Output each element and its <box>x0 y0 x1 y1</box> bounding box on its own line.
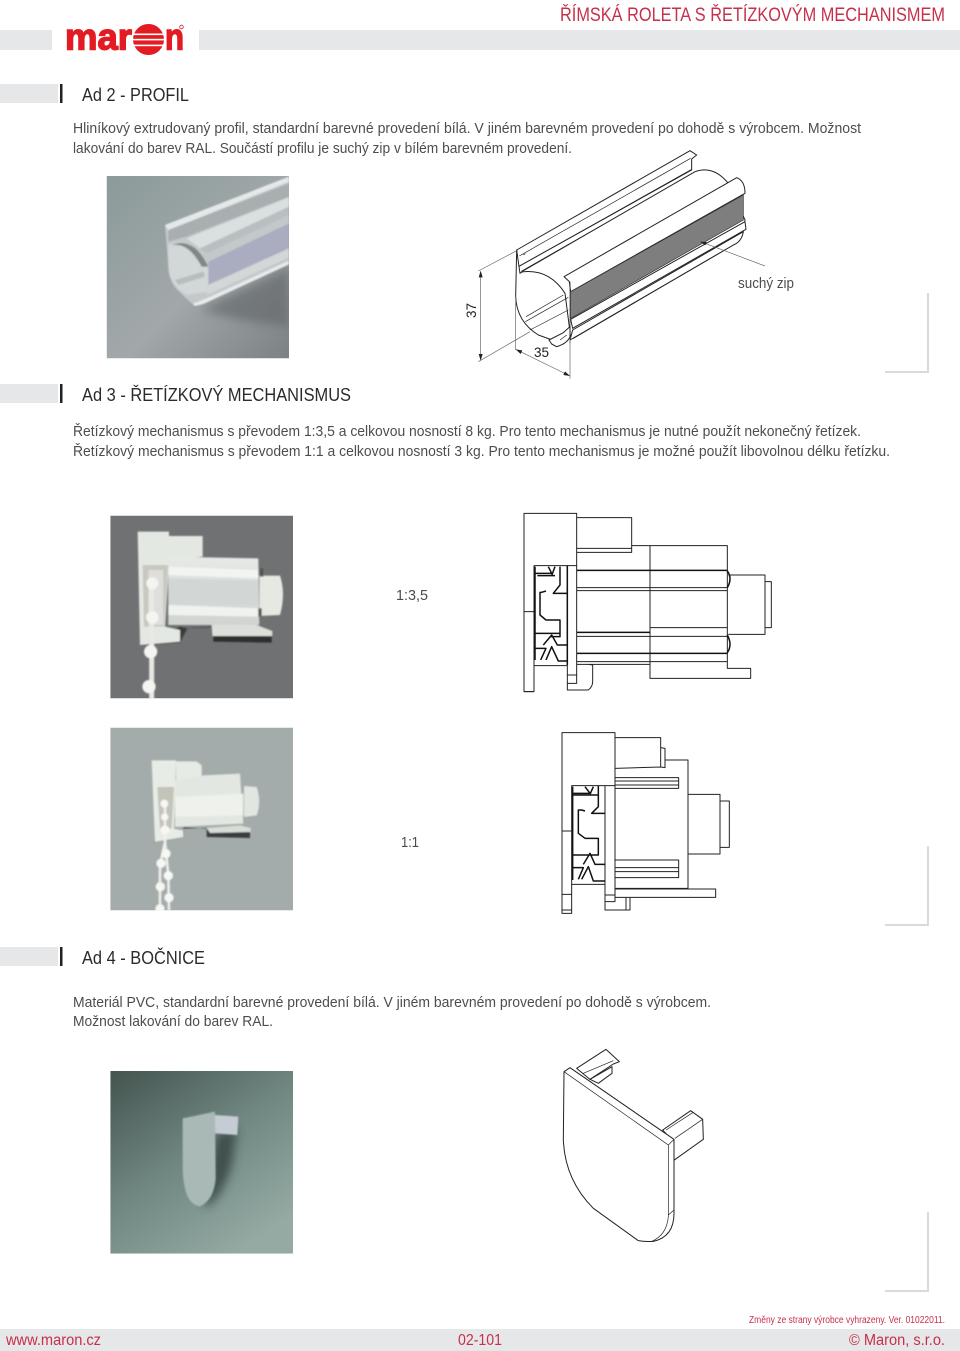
corner mark <box>885 293 928 372</box>
footer website: www.maron.cz <box>5 1332 101 1349</box>
photo: mechanism 1:1 <box>110 728 293 913</box>
text block: profil description: lakování do barev RAL. Součástí profilu je suchý zip v bílém barevném provedení. <box>73 140 572 157</box>
page number: 02-101 <box>458 1332 502 1349</box>
heading: Ad 3: Ad 3 - ŘETÍZKOVÝ MECHANISMUS <box>82 384 351 405</box>
logo: maron <box>65 16 184 58</box>
section: Ad 4 bočnice <box>0 947 928 1291</box>
label: ratio 1:1: 1:1 <box>401 834 419 851</box>
photo: mechanism 1:3,5 <box>110 516 293 700</box>
heading: Ad 2 <box>0 84 189 105</box>
logo: maron: n <box>165 16 184 58</box>
corner mark <box>885 1212 928 1291</box>
label: suchý zip: suchý zip <box>738 275 794 292</box>
text block: profil description <box>73 120 862 157</box>
heading: Ad 3 <box>0 384 351 405</box>
logo: maron: mar <box>65 16 132 58</box>
heading: Ad 2: Ad 2 - PROFIL <box>82 84 189 105</box>
diagram: side cap <box>563 1049 703 1242</box>
label: ratio 1:3,5: 1:3,5 <box>396 587 428 604</box>
diagram: mechanism 1:3,5 <box>524 513 771 692</box>
heading: Ad 4 <box>0 947 205 968</box>
text block: mechanism description: Řetízkový mechanismus s převodem 1:3,5 a celkovou nosností 8 kg. Pro tento mechanismus je nutné použít nekonečný řetízek. <box>73 423 861 440</box>
header band <box>0 30 960 50</box>
text block: mechanism description <box>73 423 890 460</box>
text block: side cap description: Možnost lakování do barev RAL. <box>73 1013 273 1030</box>
photo: side cap <box>110 1071 293 1254</box>
diagram: mechanism 1:1 <box>562 733 729 913</box>
dimension label: 35: 35 <box>534 345 549 360</box>
copyright: © Maron, s.r.o. <box>849 1332 945 1349</box>
text block: mechanism description: Řetízkový mechanismus s převodem 1:1 a celkovou nosností 3 kg. Pro tento mechanismus je možné použít libovolnou délku řetízku. <box>73 443 890 460</box>
diagram: profile with dimensions <box>478 151 765 379</box>
section: Ad 2 profil <box>0 84 928 379</box>
text block: side cap description: Materiál PVC, standardní barevné provedení bílá. V jiném barevném provedení po dohodě s výrobcem. <box>73 994 711 1011</box>
text block: side cap description <box>73 994 711 1030</box>
dimension label: 37: 37 <box>464 303 479 318</box>
heading: Ad 4: Ad 4 - BOČNICE <box>82 947 205 968</box>
footer band <box>0 1329 960 1351</box>
section: Ad 3 mechanismus <box>0 384 928 925</box>
corner mark <box>885 846 928 925</box>
photo: aluminium profile <box>107 176 289 358</box>
text block: profil description: Hliníkový extrudovaný profil, standardní barevné provedení bílá. V jiném barevném provedení po dohodě s výrobcem. Možnost <box>73 120 862 137</box>
